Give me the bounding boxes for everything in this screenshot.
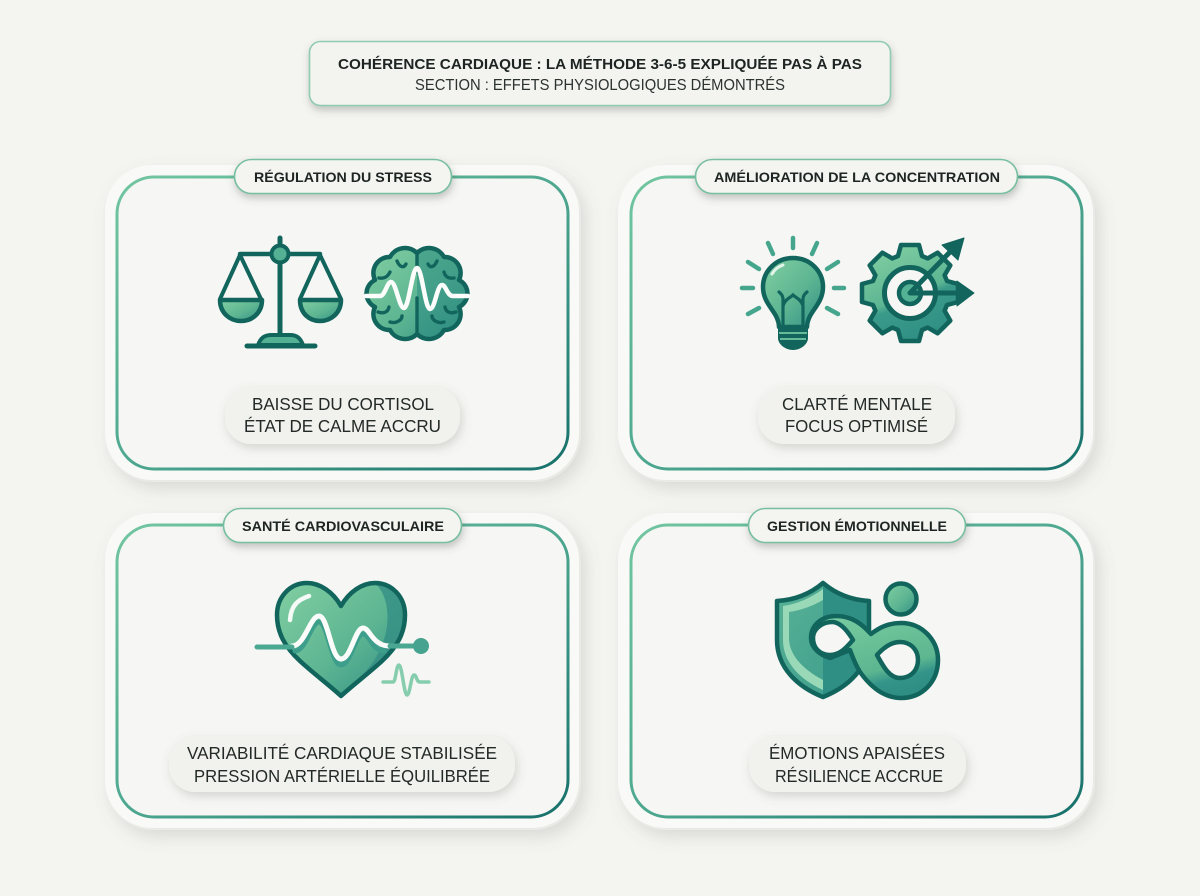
panel: amélioration de la concentration: [618, 160, 1095, 482]
icon: gear with target and arrows: [862, 238, 974, 341]
panel: santé cardiovasculaire: [105, 508, 581, 830]
heading: régulation du stress: RÉGULATION DU STRESS: [254, 169, 432, 185]
heading: gestion émotionnelle: [748, 508, 966, 542]
heading: amélioration de la concentration: [696, 160, 1018, 194]
heading: santé cardiovasculaire: [224, 508, 462, 542]
heading: santé cardiovasculaire: SANTÉ CARDIOVASCULAIRE: [242, 518, 444, 534]
panel: régulation du stress: [105, 160, 581, 482]
callout: émotions apaisées: RÉSILIENCE ACCRUE: [775, 766, 943, 786]
panel: gestion émotionnelle: [618, 508, 1095, 830]
heading: amélioration de la concentration: AMÉLIORATION DE LA CONCENTRATION: [714, 169, 1000, 185]
title banner: [310, 42, 890, 106]
heading: régulation du stress: [234, 160, 452, 194]
callout: variabilité cardiaque: VARIABILITÉ CARDIAQUE STABILISÉE: [187, 743, 497, 763]
heading: gestion émotionnelle: GESTION ÉMOTIONNELLE: [767, 518, 947, 534]
icon: heart with pulse: [257, 583, 429, 696]
callout: clarté mentale: [758, 387, 955, 444]
callout: clarté mentale: FOCUS OPTIMISÉ: [785, 416, 928, 436]
icon: light bulb: [742, 238, 844, 350]
icon: shield with infinity and person: [777, 583, 938, 698]
callout: émotions apaisées: [749, 736, 966, 792]
callout: baisse du cortisol: ÉTAT DE CALME ACCRU: [244, 416, 441, 436]
callout: baisse du cortisol: [225, 387, 460, 444]
callout: clarté mentale: CLARTÉ MENTALE: [782, 394, 932, 414]
callout: variabilité cardiaque: [169, 736, 515, 792]
callout: baisse du cortisol: BAISSE DU CORTISOL: [252, 394, 434, 414]
callout: émotions apaisées: ÉMOTIONS APAISÉES: [769, 743, 945, 763]
callout: variabilité cardiaque: PRESSION ARTÉRIELLE ÉQUILIBRÉE: [194, 766, 490, 786]
title: COHÉRENCE CARDIAQUE : LA MÉTHODE 3-6-5 EXPLIQUÉE PAS À PAS: [338, 56, 862, 73]
subtitle: SECTION : EFFETS PHYSIOLOGIQUES DÉMONTRÉS: [415, 77, 785, 94]
icon: balance scale: [220, 238, 341, 346]
icon: brain with heartbeat: [366, 248, 468, 339]
